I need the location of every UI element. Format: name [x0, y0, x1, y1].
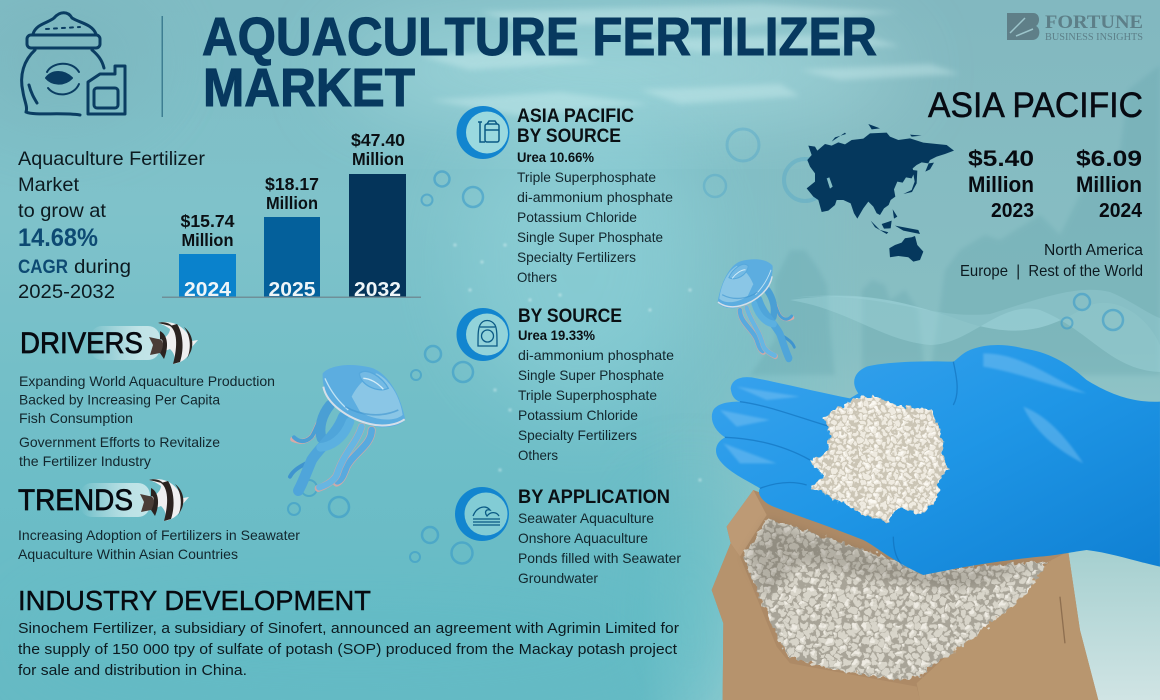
text block: market growth: Aquaculture Fertilizer — [18, 148, 206, 170]
text block: market growth — [18, 148, 206, 303]
granules in bag — [743, 518, 1048, 680]
text block: trends: Increasing Adoption of Fertilizers in Seawater — [18, 527, 300, 543]
panel: Asia Pacific by source: Specialty Fertilizers — [517, 249, 636, 265]
text block: drivers: Government Efforts to Revitalize — [19, 434, 220, 450]
stat: 2023 market size: 2023 — [991, 200, 1034, 222]
panel: by application: Seawater Aquaculture — [518, 510, 654, 526]
icon: bag circle — [456, 308, 510, 361]
text block: drivers: Fish Consumption — [19, 410, 133, 426]
panel: Asia Pacific by source: Others — [517, 269, 557, 285]
heading: trends with fish: TRENDS — [18, 484, 133, 517]
text block: industry development — [18, 620, 679, 679]
stat: 2024 market size: $6.09 — [1076, 146, 1142, 171]
icon: fertilizer bag and canister — [22, 13, 125, 115]
bar chart: market size: Million — [266, 193, 318, 213]
bar chart: market size: Million — [352, 149, 404, 169]
panel: by application: Groundwater — [518, 570, 598, 586]
text block: market growth: 2025-2032 — [18, 281, 115, 303]
text block: other regions: North America — [1044, 242, 1143, 259]
stat: 2024 market size: 2024 — [1099, 200, 1143, 222]
panel: Asia Pacific by source: Potassium Chloride — [517, 209, 637, 225]
bar chart: market size — [162, 130, 421, 301]
panel: by source: Specialty Fertilizers — [518, 427, 637, 443]
logo: Fortune Business Insights: FORTUNE — [1045, 12, 1143, 33]
text block: other regions — [960, 242, 1143, 280]
panel: Asia Pacific by source — [517, 105, 673, 285]
map: Asia Pacific — [807, 124, 954, 262]
panel: by source: Triple Superphosphate — [518, 387, 657, 403]
stat: 2023 market size: $5.40 — [968, 146, 1034, 171]
bar chart: market size: 2032 — [354, 278, 401, 301]
heading: Asia Pacific: ASIA PACIFIC — [928, 86, 1143, 125]
glove — [712, 345, 1160, 575]
panel: by source: Potassium Chloride — [518, 407, 638, 423]
text block: drivers — [19, 373, 275, 469]
title: AQUACULTURE FERTILIZER — [202, 7, 877, 67]
stat: 2023 market size — [968, 146, 1034, 222]
illustration: jellyfish left — [290, 365, 405, 491]
panel: Asia Pacific by source: BY SOURCE — [517, 125, 621, 147]
coral silhouettes — [750, 65, 1160, 375]
panel: by source: BY SOURCE — [518, 305, 622, 327]
panel: by source: Urea 19.33% — [518, 328, 595, 343]
bar chart: market size: $18.17 — [265, 174, 319, 194]
title: MARKET — [203, 58, 415, 118]
panel: by application: BY APPLICATION — [518, 486, 670, 508]
stat: 2024 market size: Million — [1076, 172, 1142, 197]
panel: by application: Onshore Aquaculture — [518, 530, 648, 546]
title — [202, 7, 877, 118]
panel: by source: Single Super Phosphate — [518, 367, 664, 383]
text block: trends — [18, 527, 300, 562]
bubbles — [288, 129, 1123, 564]
panel: Asia Pacific by source: Single Super Phosphate — [517, 229, 663, 245]
bar chart: market size: 2024 — [184, 278, 232, 301]
text block: industry development: for sale and distribution in China. — [18, 662, 247, 679]
photo: paper bag of granules and gloved hand — [712, 345, 1160, 700]
bar chart: market size: 2025 — [268, 278, 316, 301]
text block: other regions: Europe | Rest of the World — [960, 263, 1143, 280]
paper bag — [712, 490, 1098, 700]
text block: market growth: Market — [18, 174, 80, 196]
text block: industry development: Sinochem Fertilizer, a subsidiary of Sinofert, announced an agreement with Agrimin Limited for — [18, 620, 679, 637]
granules in hand — [810, 397, 950, 522]
text block: market growth: 14.68% — [18, 224, 98, 252]
panel: Asia Pacific by source: Triple Superphosphate — [517, 169, 656, 185]
stat: 2024 market size — [1076, 146, 1143, 222]
panel: by application: Ponds filled with Seawater — [518, 550, 681, 566]
divider — [162, 16, 163, 117]
text block: industry development: the supply of 150 000 tpy of sulfate of potash (SOP) produced from the Mackay potash project — [18, 641, 678, 658]
panel: by source — [518, 305, 674, 463]
panel: Asia Pacific by source: di-ammonium phosphate — [517, 189, 673, 205]
illustration: jellyfish right — [718, 259, 794, 358]
panel: Asia Pacific by source: Urea 10.66% — [517, 150, 594, 165]
icon: sprayer circle — [456, 106, 510, 159]
panel: Asia Pacific by source: ASIA PACIFIC — [517, 105, 634, 127]
logo: Fortune Business Insights: BUSINESS INSIGHTS — [1045, 32, 1143, 43]
text block: market growth: during — [74, 256, 131, 278]
text block: drivers: Backed by Increasing Per Capita — [19, 392, 220, 408]
stat: 2023 market size: Million — [968, 172, 1034, 197]
text block: market growth: to grow at — [18, 200, 107, 222]
icon: wave circle — [455, 487, 509, 541]
text block: market growth: CAGR — [18, 257, 68, 278]
panel: by source: Others — [518, 447, 558, 463]
panel: by application — [518, 486, 681, 586]
text block: drivers: Expanding World Aquaculture Production — [19, 373, 275, 389]
heading: industry development: INDUSTRY DEVELOPMENT — [18, 585, 371, 616]
logo: Fortune Business Insights — [1007, 12, 1143, 43]
panel: by source: di-ammonium phosphate — [518, 347, 674, 363]
heading: drivers with fish: DRIVERS — [20, 327, 143, 360]
heading: trends with fish — [18, 479, 189, 521]
bar chart: market size: Million — [182, 230, 234, 250]
bar chart: market size: $15.74 — [180, 211, 235, 231]
text block: trends: Aquaculture Within Asian Countries — [18, 546, 238, 562]
text block: drivers: the Fertilizer Industry — [19, 453, 151, 469]
heading: drivers with fish — [20, 322, 198, 364]
bar chart: market size: $47.40 — [351, 130, 405, 150]
